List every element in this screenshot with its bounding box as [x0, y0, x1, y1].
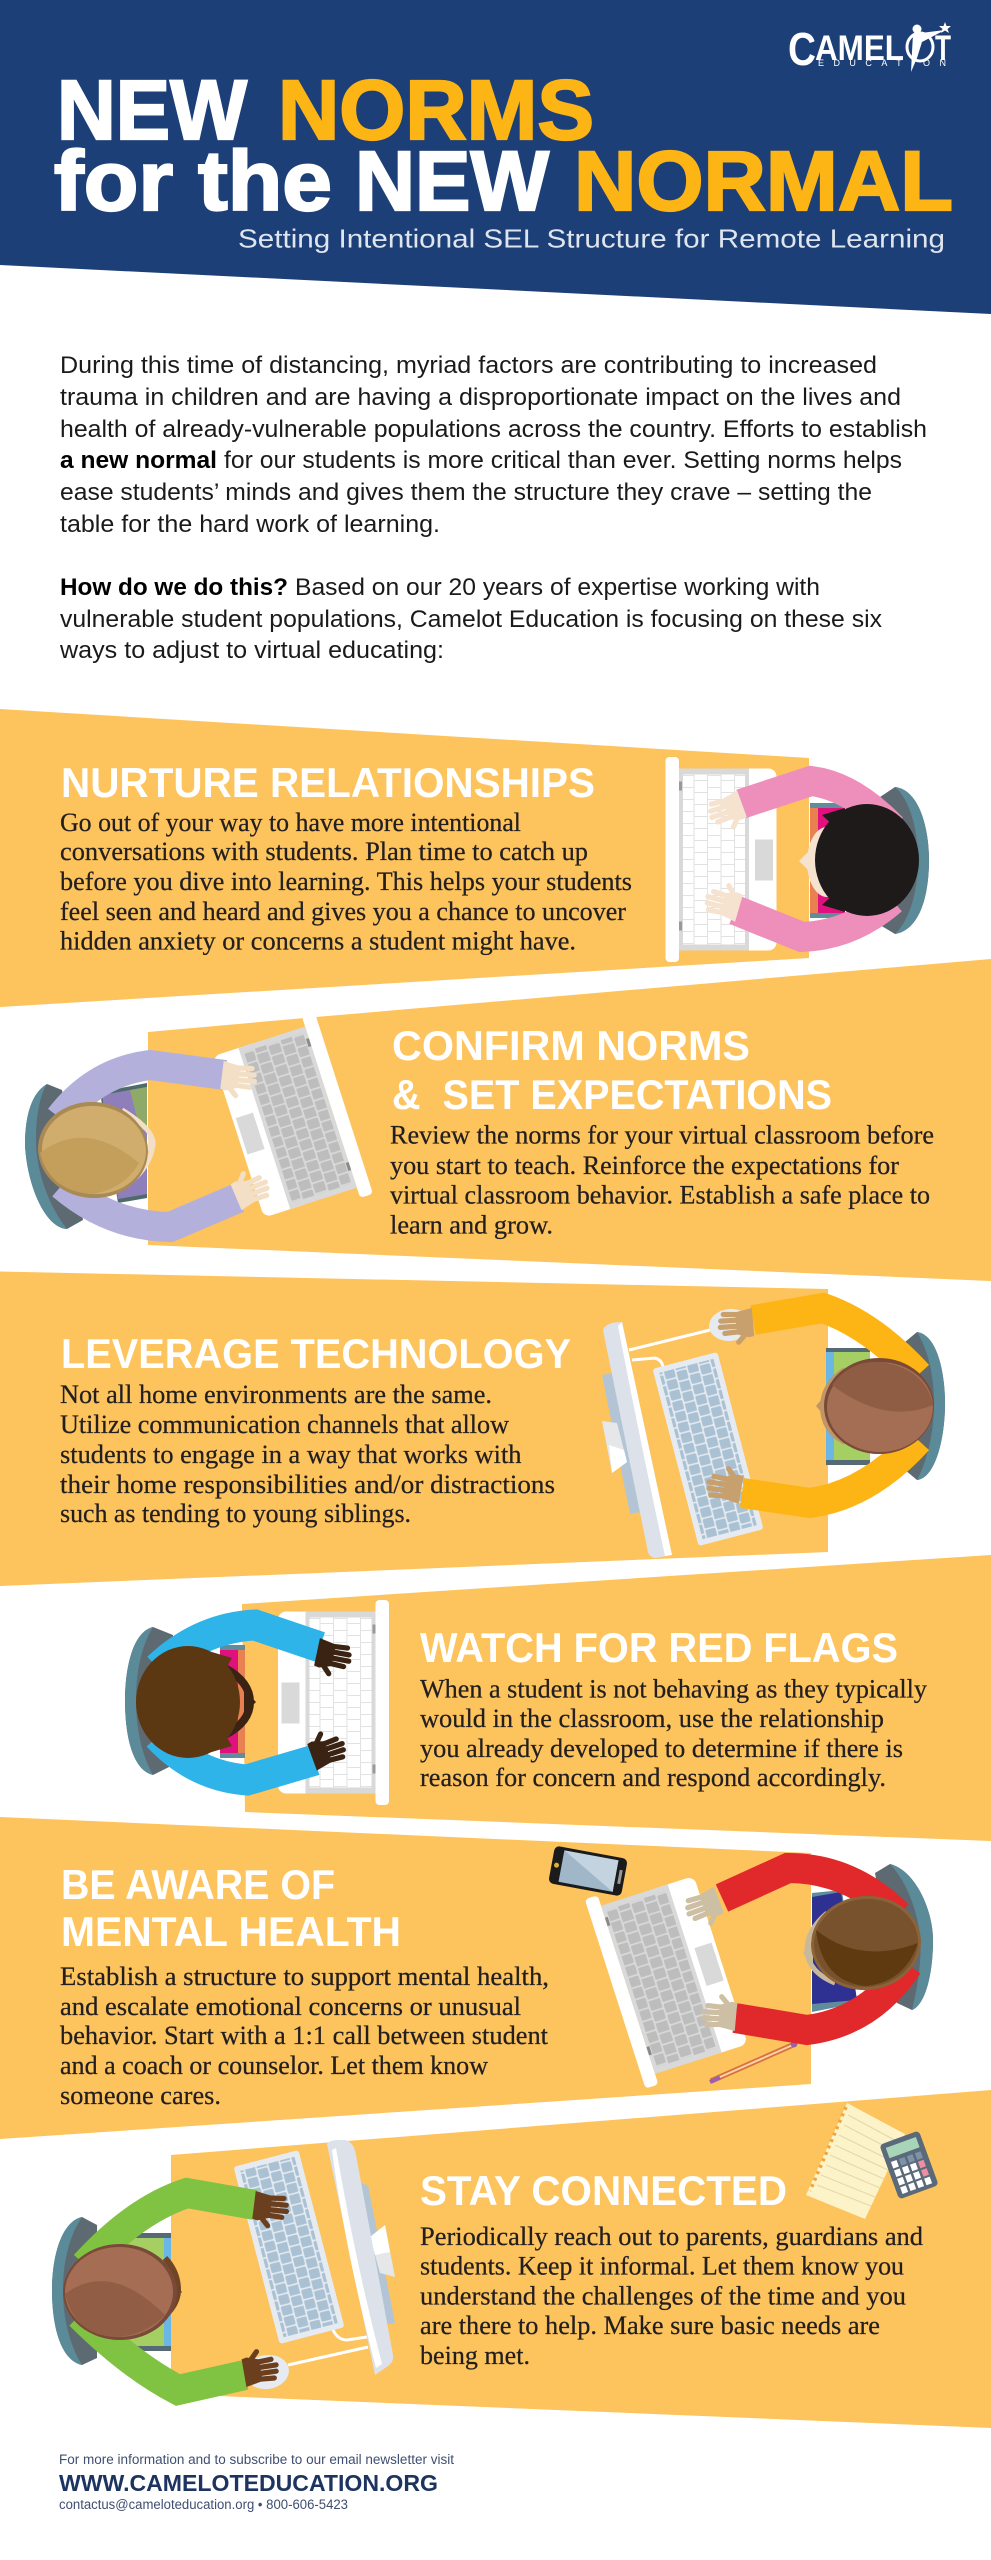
body text: When a student is not behaving as they typically [420, 1674, 927, 1704]
body text: such as tending to young siblings. [60, 1499, 411, 1528]
title: NEW [355, 134, 550, 228]
body text: their home responsibilities and/or distractions [60, 1470, 555, 1499]
title: for the [54, 134, 332, 228]
panel: leverage technology [0, 1272, 945, 1586]
title: NORMAL [574, 134, 953, 228]
body text: behavior. Start with a 1:1 call between student [60, 2021, 549, 2050]
icon: notepad [806, 2103, 905, 2219]
logo: Camelot Education: AMEL [815, 29, 904, 68]
intro text: health of already-vulnerable populations across the country. Efforts to establish [60, 416, 927, 443]
illustration: student in blue at laptop [125, 1600, 389, 1805]
body text: before you dive into learning. This helps your students [60, 867, 632, 896]
intro text: Based on our 20 years of expertise working with [295, 574, 820, 601]
heading: BE AWARE OF [61, 1861, 335, 1908]
body text: someone cares. [60, 2081, 221, 2110]
heading: NURTURE RELATIONSHIPS [61, 759, 595, 806]
intro text: During this time of distancing, myriad factors are contributing to increased [60, 352, 877, 379]
body text: virtual classroom behavior. Establish a safe place to [390, 1180, 930, 1210]
intro text: ways to adjust to virtual educating: [59, 637, 444, 664]
body text: understand the challenges of the time and you [420, 2282, 906, 2311]
body text: students. Keep it informal. Let them know you [420, 2252, 904, 2280]
footer: contactus@cameloteducation.org • 800-606-5423 [59, 2497, 348, 2512]
body text: learn and grow. [390, 1210, 553, 1240]
body text: you start to teach. Reinforce the expectations for [390, 1151, 899, 1180]
heading: CONFIRM NORMS [392, 1022, 750, 1069]
intro text: trauma in children and are having a disproportionate impact on the lives and [60, 384, 901, 411]
body text [390, 1120, 934, 1240]
illustration: student in pink at laptop [666, 757, 929, 962]
title: NORMS [278, 63, 594, 157]
body text [60, 1962, 549, 2110]
panel: be aware of mental health [0, 1817, 933, 2139]
body text: feel seen and heard and gives you a chance to uncover [60, 897, 626, 926]
heading: LEVERAGE TECHNOLOGY [61, 1330, 571, 1377]
heading: MENTAL HEALTH [61, 1908, 401, 1955]
body text: being met. [420, 2341, 530, 2370]
body text: you already developed to determine if there is [420, 1734, 903, 1763]
body text [420, 1674, 927, 1792]
body text: and a coach or counselor. Let them know [60, 2051, 488, 2080]
icon: smartphone [548, 1846, 628, 1896]
body text: are there to help. Make sure basic needs are [420, 2311, 880, 2340]
illustration: student in lavender at laptop [25, 1012, 373, 1229]
panel: nurture relationships [0, 709, 929, 1007]
title [54, 63, 953, 228]
logo: Camelot Education: EDUCATION [818, 58, 946, 68]
body text: Establish a structure to support mental health, [60, 1962, 549, 1991]
illustration: student in yellow at desktop computer [602, 1307, 945, 1558]
body text: Not all home environments are the same. [60, 1380, 492, 1409]
intro text: vulnerable student populations, Camelot Education is focusing on these six [60, 606, 882, 633]
intro text: ease students’ minds and gives them the structure they crave – setting the [60, 479, 872, 506]
heading: & SET EXPECTATIONS [392, 1071, 832, 1118]
body text: and escalate emotional concerns or unusual [60, 1992, 521, 2021]
body text [60, 808, 632, 956]
body text: conversations with students. Plan time to catch up [60, 837, 588, 866]
body text: Go out of your way to have more intentional [60, 808, 521, 837]
body text: Utilize communication channels that allow [60, 1410, 509, 1439]
footer: WWW.CAMELOTEDUCATION.ORG [59, 2470, 438, 2496]
body text: hidden anxiety or concerns a student might have. [60, 926, 576, 956]
title: NEW [57, 63, 248, 157]
heading [392, 1022, 832, 1118]
body text [60, 1380, 555, 1528]
header banner [0, 0, 991, 314]
body text: would in the classroom, use the relationship [420, 1704, 884, 1733]
icon: pencil [710, 2041, 797, 2082]
heading [61, 1861, 401, 1955]
logo: Camelot Education: T [935, 29, 951, 68]
body text: Periodically reach out to parents, guardians and [420, 2222, 923, 2251]
intro text: for our students is more critical than ever. Setting norms helps [224, 447, 902, 474]
intro text: How do we do this? [60, 574, 288, 601]
panel: confirm norms and set expectations [25, 959, 991, 1281]
footer: For more information and to subscribe to our email newsletter visit [59, 2452, 454, 2467]
logo: Camelot Education: C [788, 23, 816, 75]
heading: STAY CONNECTED [420, 2167, 787, 2214]
body text [420, 2222, 923, 2370]
body text: students to engage in a way that works with [60, 1440, 522, 1469]
body text: Review the norms for your virtual classroom before [390, 1120, 934, 1150]
panel: stay connected [52, 2090, 991, 2428]
body text: reason for concern and respond accordingly. [420, 1763, 886, 1792]
heading: WATCH FOR RED FLAGS [420, 1624, 898, 1671]
illustration: student in red at laptop [585, 1864, 933, 2089]
illustration: student in green at desktop computer [52, 2140, 395, 2392]
icon: calculator [879, 2131, 939, 2199]
intro text: a new normal [60, 447, 217, 474]
subtitle: Setting Intentional SEL Structure for Remote Learning [238, 224, 945, 254]
footer [59, 2452, 454, 2512]
intro text: table for the hard work of learning. [60, 511, 440, 538]
logo: Camelot Education [788, 22, 951, 75]
intro text [59, 352, 927, 664]
panel: watch for red flags [125, 1555, 991, 1841]
